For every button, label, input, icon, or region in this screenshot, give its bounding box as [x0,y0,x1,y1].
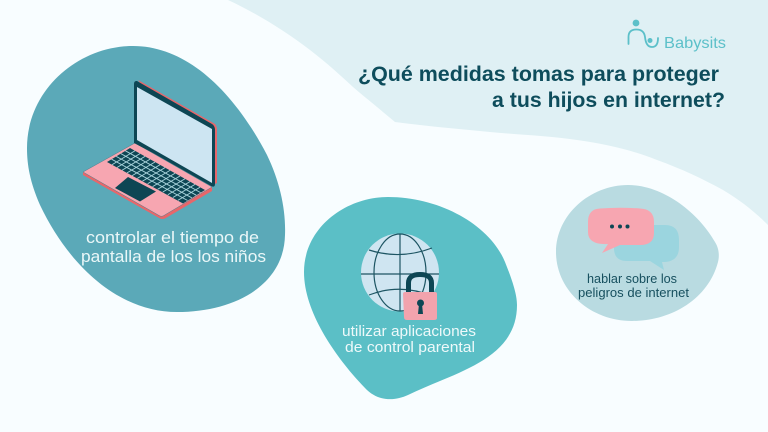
text: utilizar aplicaciones: de control parental [345,340,475,356]
text: utilizar aplicaciones: utilizar aplicaciones [342,324,476,340]
title [358,63,725,112]
title: a tus hijos en internet? [492,89,725,112]
text: hablar sobre los [578,272,690,300]
panel: parental control [304,197,517,399]
text: hablar sobre los: peligros de internet [578,286,690,300]
text: controlar el tiempo [81,229,266,266]
icon: laptop [83,80,217,219]
text: utilizar aplicaciones [342,324,476,356]
logo: Babysits [628,20,726,52]
panel: talk about dangers [556,185,719,321]
text: controlar el tiempo: controlar el tiempo de [86,229,259,247]
blob: dangers background [556,185,719,321]
background shape: top right wave [228,0,768,225]
icon: pink speech bubble [588,208,654,253]
icon: blue speech bubble [614,225,679,270]
title: ¿Qué medidas tomas para proteger [358,63,719,86]
blob: parental control background [304,197,517,399]
panel: screen time [27,46,285,312]
icon: globe [361,234,439,312]
blob: screen time background [27,46,285,312]
text: hablar sobre los: hablar sobre los [587,272,677,286]
icon: padlock [403,274,437,320]
text: controlar el tiempo: pantalla de los los niños [81,248,266,266]
logo: Babysits: Babysits [664,35,726,52]
